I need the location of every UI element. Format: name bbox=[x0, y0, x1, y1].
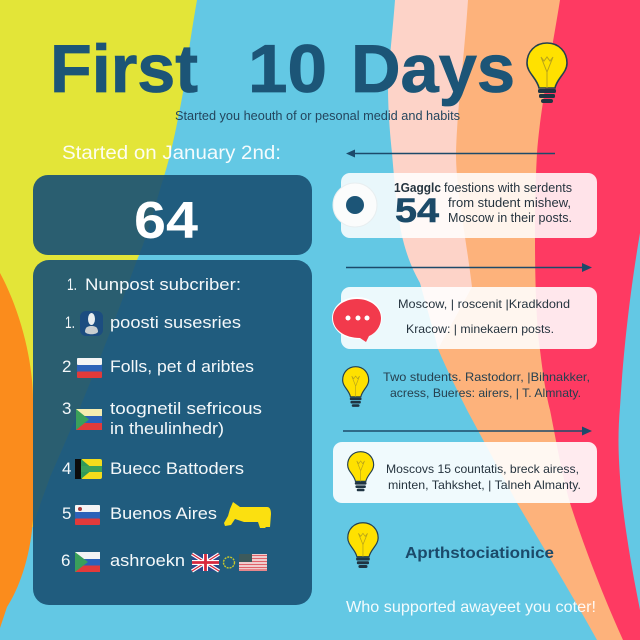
card text: Moscow, | roscenit |Kradkdond bbox=[398, 297, 570, 311]
list item 3: 3 bbox=[62, 399, 71, 418]
text block: two students bbox=[383, 370, 590, 400]
list item 2: 2 bbox=[62, 357, 71, 376]
card text: Kracow: | minekaern posts. bbox=[406, 322, 554, 336]
list item 1: 1. bbox=[65, 313, 75, 332]
list item 4: Buecc Battoders bbox=[110, 459, 244, 478]
list item 2: Folls, pet d aribtes bbox=[110, 357, 254, 376]
card text bbox=[386, 462, 581, 492]
text block: two students: Two students. Rastodorr, |Bihnakker, bbox=[383, 370, 590, 384]
list item 6 bbox=[61, 551, 267, 572]
card text: 54 bbox=[395, 192, 439, 230]
icon: UK flag bbox=[192, 554, 219, 571]
card text bbox=[394, 181, 572, 230]
subtitle: Started you heouth of or pesonal medid and habits bbox=[175, 109, 460, 123]
list item 4: 4 bbox=[62, 459, 71, 478]
card: cities and posts bbox=[332, 287, 597, 349]
card text: 1Gagglc bbox=[394, 181, 441, 195]
icon: striped flag bbox=[239, 554, 267, 571]
card text bbox=[398, 297, 570, 336]
card text: Moscow in their posts. bbox=[448, 211, 572, 225]
list item 3 bbox=[62, 399, 262, 438]
list item 5 bbox=[62, 502, 271, 528]
icon: title light bulb bbox=[527, 43, 567, 103]
icon: large light bulb bbox=[348, 523, 378, 568]
card text: Moscovs 15 countatis, breck airess, bbox=[386, 462, 579, 476]
list item 1: poosti susesries bbox=[110, 313, 241, 332]
arrow: pointing right, lower bbox=[343, 426, 592, 436]
list heading: 1. bbox=[67, 275, 77, 294]
icon: ring of stars bbox=[224, 557, 234, 568]
list item 1 bbox=[65, 311, 241, 336]
card: 54 posts bbox=[333, 173, 597, 238]
card text: foestions with serdents bbox=[444, 181, 572, 195]
icon: red speech bubble bbox=[332, 297, 382, 342]
icon: card light bulb bbox=[348, 452, 374, 491]
bold caption: Aprthstociationice bbox=[405, 545, 554, 562]
icon: small light bulb bbox=[343, 367, 369, 407]
arrow: pointing left bbox=[346, 150, 555, 158]
list item 6: 6 bbox=[61, 551, 70, 570]
list item 3: in theulinhedr) bbox=[110, 419, 224, 438]
closing line: Who supported awayeet you coter! bbox=[346, 599, 596, 616]
icon: target dot bbox=[333, 183, 377, 227]
text block: two students: acress, Bueres: airers, | T. Almnaty. bbox=[390, 386, 581, 400]
icon: yellow cow bbox=[224, 502, 271, 528]
section heading: start date: Started on January 2nd: bbox=[62, 143, 281, 164]
list item 3: toognetil sefricous bbox=[110, 399, 262, 418]
panel: big number 64 bbox=[33, 175, 312, 255]
list item 4 bbox=[62, 459, 244, 479]
title: 10 bbox=[248, 31, 327, 107]
panel: big number 64: 64 bbox=[134, 192, 198, 250]
arrow: pointing right bbox=[346, 263, 592, 272]
list item 5: Buenos Aires bbox=[110, 504, 217, 523]
list item 2 bbox=[62, 357, 254, 378]
panel: subscriber list bbox=[33, 260, 312, 605]
list heading: Nunpost subcriber: bbox=[85, 275, 241, 294]
list item 5: 5 bbox=[62, 504, 71, 523]
card: countries bbox=[333, 442, 597, 503]
card text: minten, Tahkshet, | Talneh Almanty. bbox=[388, 478, 581, 492]
title: Days bbox=[351, 31, 515, 107]
list item 6: ashroekn bbox=[110, 551, 185, 570]
card text: from student mishew, bbox=[448, 196, 571, 210]
title bbox=[50, 31, 515, 107]
title: First bbox=[50, 31, 198, 107]
